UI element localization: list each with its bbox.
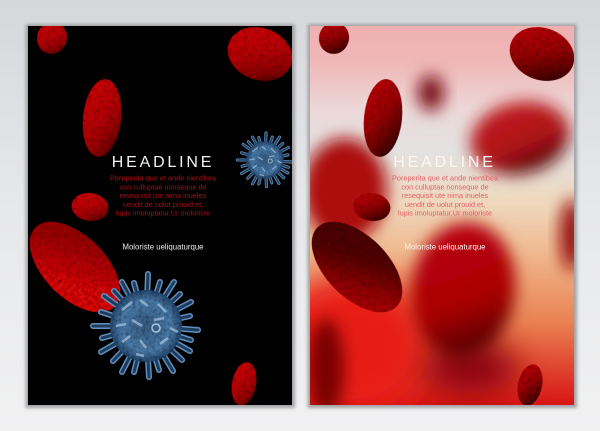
body text: uendit de uolut prouid et, [123,200,203,209]
subtitle: Moloriste ueliquaturque [122,242,204,252]
body text: lupis imoluptatur,Ur moloriste [116,208,210,218]
body text: con culluptae nonseque de [119,182,207,192]
panel: light flyer [310,26,574,405]
cell: small middle [354,193,391,222]
cell: large lower left [312,222,402,312]
cell: top left [318,26,350,54]
cell: top left [36,26,68,54]
body text: uendit de uolut prouid et, [405,200,485,209]
body text [110,174,217,218]
body text: lupis imoluptatur,Ur moloriste [398,208,492,218]
headline: HEADLINE [112,154,214,171]
virus: small [237,133,292,187]
cell: tall center [363,79,403,157]
cell: large lower left [30,222,120,312]
body text [392,174,499,218]
blurred cells [310,64,574,405]
panel: dark flyer [28,26,292,405]
cell: bottom right [231,362,257,405]
cell: top right [228,26,292,82]
subtitle: Moloriste ueliquaturque [404,242,486,252]
cell: bottom right [517,364,543,405]
body text: resequisit ute nima inueles [120,191,207,200]
body text: Poreperita que et ande nientibea [110,174,217,182]
body text: resequisit ute nima inueles [402,191,489,200]
headline: HEADLINE [393,154,496,171]
body text: con culluptae nonseque de [401,182,489,192]
virus: large [93,274,198,377]
body text: Poreperita que et ande nientibea [392,174,499,182]
cell: tall center [82,79,122,157]
cell: small middle [71,192,109,222]
cell: top right [510,26,574,82]
